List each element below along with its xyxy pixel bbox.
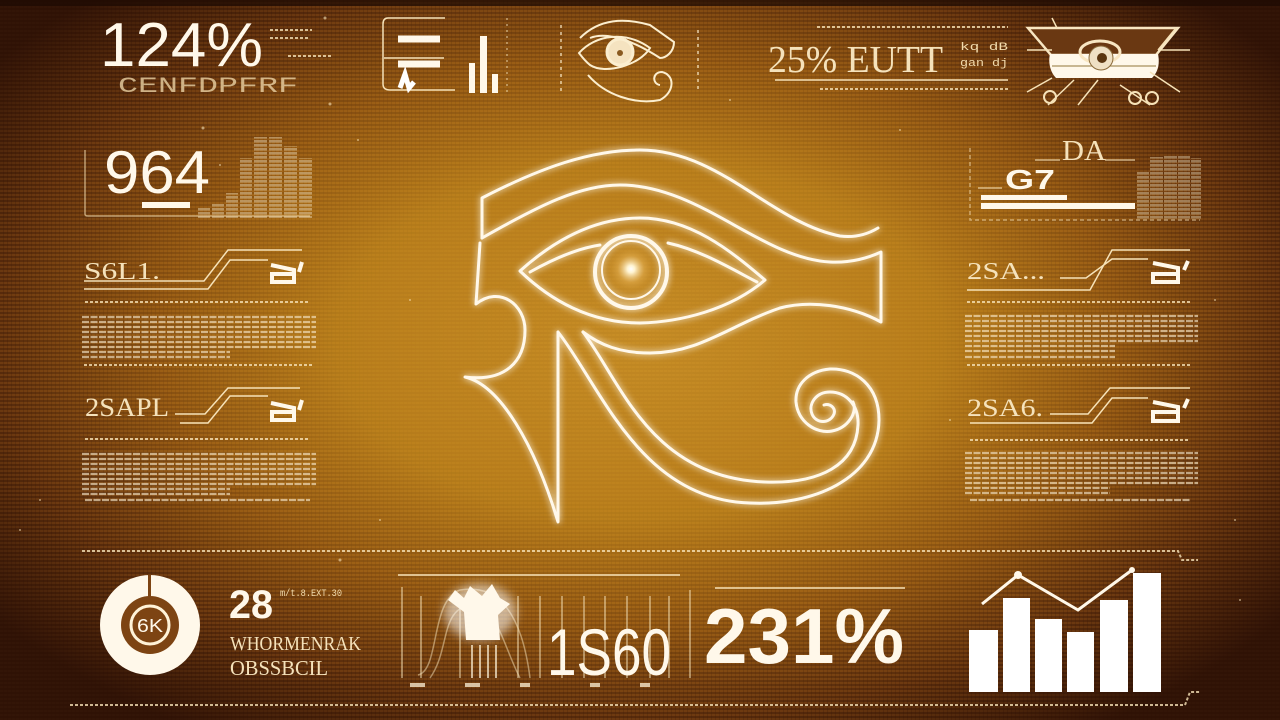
- stat: 25 percent header: [768, 27, 1009, 89]
- stat: 25 percent header: kq dB: [960, 42, 1009, 54]
- text block: [965, 453, 1198, 500]
- stat panel: 964: 964: [104, 139, 210, 206]
- stat: 28 with label: m/t.8.EXT.30: [280, 588, 342, 600]
- left contour and teardrop: [465, 243, 558, 522]
- text block: [965, 316, 1198, 357]
- inner spiral tail: [583, 332, 858, 482]
- stat: 28 with label: WHORMENRAK: [230, 633, 361, 655]
- bar chart: striped right: [1137, 155, 1201, 220]
- right panel 2: 2SA6.: [967, 395, 1043, 422]
- outer spiral tail: [558, 332, 879, 503]
- upper lid inner line: [530, 243, 757, 282]
- left panel 2: [82, 388, 316, 500]
- text block: [82, 454, 316, 500]
- stat: 124 percent: 124%: [100, 11, 263, 80]
- icon: glyph: [1153, 261, 1188, 282]
- left panel 1: S6L1.: [84, 259, 160, 285]
- donut chart: 6K: [137, 616, 163, 636]
- bottom frame lines: [70, 551, 1200, 705]
- icon: glyph: [271, 400, 302, 420]
- lower brow and cheek line: [482, 185, 881, 353]
- stat: 231 percent: 231%: [704, 592, 904, 680]
- line chart with burst and 1S60: [398, 575, 690, 689]
- right panel 2: [965, 388, 1198, 500]
- icon: glyph: [271, 262, 302, 282]
- text block: [82, 317, 316, 357]
- icon: glyph: [1153, 399, 1188, 421]
- stat: 124 percent: CENFDPFRF: [118, 74, 298, 99]
- stat: 28 with label: OBSSBCIL: [230, 656, 328, 680]
- stat panel: G7 DA: G7: [1005, 164, 1055, 195]
- donut chart: [100, 575, 200, 675]
- bar chart: striped: [198, 137, 312, 218]
- stat panel: G7 DA: DA: [1062, 136, 1107, 167]
- burst glow: [444, 584, 516, 678]
- stat panel: G7 DA: [970, 136, 1201, 220]
- icon: small eye of Horus: [561, 21, 698, 101]
- icon: winged eye emblem: [1027, 18, 1190, 105]
- icon: list and bars panel: [383, 18, 507, 93]
- central Eye of Horus: [465, 150, 881, 522]
- eye outline: [520, 218, 765, 323]
- left panel 2: 2SAPL: [85, 393, 169, 422]
- stat: 25 percent header: gan dj: [960, 58, 1008, 70]
- stat: 28 with label: [229, 583, 361, 680]
- stat: 124 percent: [100, 11, 332, 99]
- left panel 1: [82, 250, 316, 365]
- right panel 1: [965, 250, 1198, 365]
- decorative specks: [19, 16, 1241, 601]
- stat: 25 percent header: 25% EUTT: [768, 39, 943, 81]
- pupil glow: [604, 242, 658, 296]
- eyebrow: [482, 150, 878, 238]
- line chart with burst and 1S60: 1S60: [547, 615, 671, 689]
- stat: 28 with label: 28: [229, 583, 273, 627]
- iris: [595, 236, 667, 308]
- bar and line chart: [969, 567, 1161, 692]
- right panel 1: 2SA...: [967, 259, 1045, 285]
- stat panel: 964: [85, 137, 312, 218]
